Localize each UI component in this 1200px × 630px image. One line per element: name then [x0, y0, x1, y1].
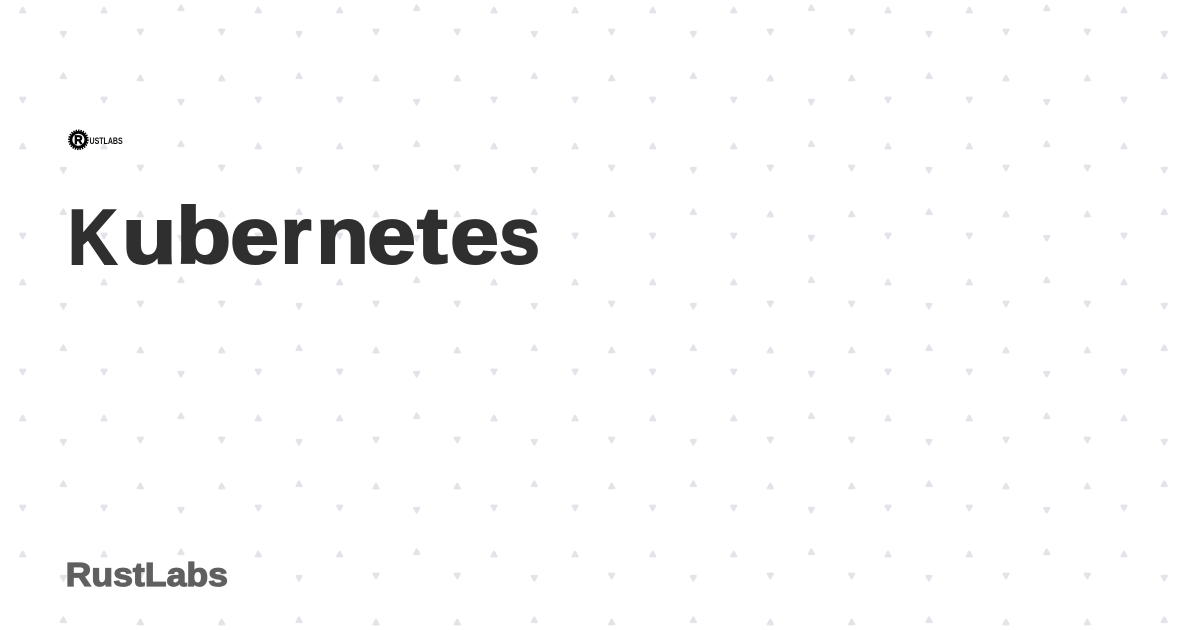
title: K [68, 192, 117, 280]
title: e [367, 191, 416, 280]
title: t [416, 191, 447, 280]
title: b [176, 191, 232, 280]
title: u [122, 191, 177, 280]
title: e [230, 191, 279, 280]
brand name: RustLabs [66, 556, 228, 593]
title: e [450, 191, 499, 280]
logo wordmark: USTLABS [90, 136, 123, 147]
logo: RustLabs gear and wordmark [69, 130, 123, 149]
title [68, 191, 540, 280]
icon: rust gear: R [74, 135, 83, 147]
title: s [499, 191, 540, 280]
title: r [280, 191, 312, 280]
title: n [316, 191, 369, 280]
